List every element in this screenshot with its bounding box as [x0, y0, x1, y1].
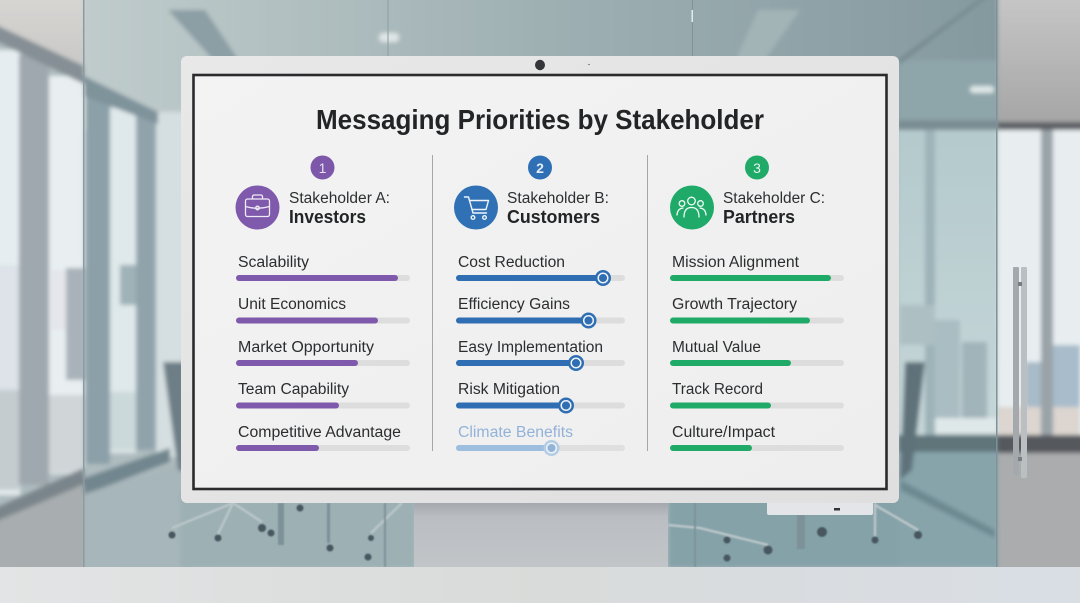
column divider A/B: [432, 155, 433, 451]
icon: shopping cart: [454, 186, 498, 230]
item: Risk Mitigation: Risk Mitigation: [458, 381, 560, 398]
item: Unit Economics: [236, 296, 410, 324]
heading: Stakeholder A: Stakeholder A:: [289, 190, 390, 207]
window sill: [0, 567, 1080, 603]
number badge 2: [528, 156, 552, 180]
item: Easy Implementation: Easy Implementation: [458, 339, 603, 356]
heading: Stakeholder B: Customers: [507, 207, 600, 227]
item: Scalability: Scalability: [238, 254, 309, 271]
number badge 1: 1: [319, 160, 327, 176]
door handle: [1013, 267, 1027, 478]
item: Climate Benefits (faded): [456, 424, 625, 456]
item: Track Record: [670, 381, 844, 408]
column divider B/C: [647, 155, 648, 451]
icon: briefcase: [236, 186, 280, 230]
item: Climate Benefits (faded): Climate Benefits: [458, 424, 573, 441]
item: Efficiency Gains: Efficiency Gains: [458, 296, 570, 313]
heading: Stakeholder B: Stakeholder B:: [507, 190, 609, 207]
item: Growth Trajectory: [670, 296, 844, 324]
item: Mutual Value: [670, 339, 844, 366]
device under monitor: [767, 500, 873, 515]
panel: Stakeholder C: [670, 156, 844, 451]
heading: Stakeholder A: Investors: [289, 207, 366, 227]
item: Competitive Advantage: Competitive Advantage: [238, 424, 401, 441]
item: Growth Trajectory: Growth Trajectory: [672, 296, 797, 313]
number badge 3: 3: [753, 160, 761, 176]
icon: people: [670, 186, 714, 230]
monitor stand: [414, 500, 668, 568]
item: Culture/Impact: [670, 424, 844, 451]
monitor: [181, 56, 899, 503]
title: Messaging Priorities by Stakeholder: [316, 104, 764, 135]
item: Cost Reduction: Cost Reduction: [458, 254, 565, 271]
heading: Stakeholder C: Stakeholder C:: [723, 190, 825, 207]
item: Unit Economics: Unit Economics: [238, 296, 346, 313]
heading: Stakeholder C: [723, 190, 825, 227]
item: Risk Mitigation: [456, 381, 625, 414]
office chairs seen under the monitor: [168, 503, 922, 567]
item: Team Capability: Team Capability: [238, 381, 349, 398]
item: Culture/Impact: Culture/Impact: [672, 424, 776, 441]
webcam: [535, 60, 590, 70]
heading: Stakeholder C: Partners: [723, 207, 795, 227]
heading: Stakeholder A: [289, 190, 390, 227]
item: Easy Implementation: [456, 339, 625, 371]
item: Scalability: [236, 254, 410, 281]
item: Mission Alignment: Mission Alignment: [672, 254, 800, 271]
item: Market Opportunity: Market Opportunity: [238, 339, 374, 356]
item: Team Capability: [236, 381, 410, 408]
item: Mutual Value: Mutual Value: [672, 339, 761, 356]
screen: [194, 75, 886, 489]
item: Efficiency Gains: [456, 296, 625, 328]
heading: Stakeholder B: [507, 190, 609, 227]
item: Competitive Advantage: [236, 424, 410, 451]
item: Cost Reduction: [456, 254, 625, 286]
item: Market Opportunity: [236, 339, 410, 366]
number badge 2: 2: [536, 160, 544, 176]
panel: Stakeholder A: [236, 156, 410, 451]
item: Mission Alignment: [670, 254, 844, 281]
monitor bezel: [181, 56, 899, 503]
item: Track Record: Track Record: [672, 381, 763, 398]
number badge 3: [745, 156, 769, 180]
number badge 1: [310, 156, 334, 180]
panel: Stakeholder B: [454, 156, 625, 456]
